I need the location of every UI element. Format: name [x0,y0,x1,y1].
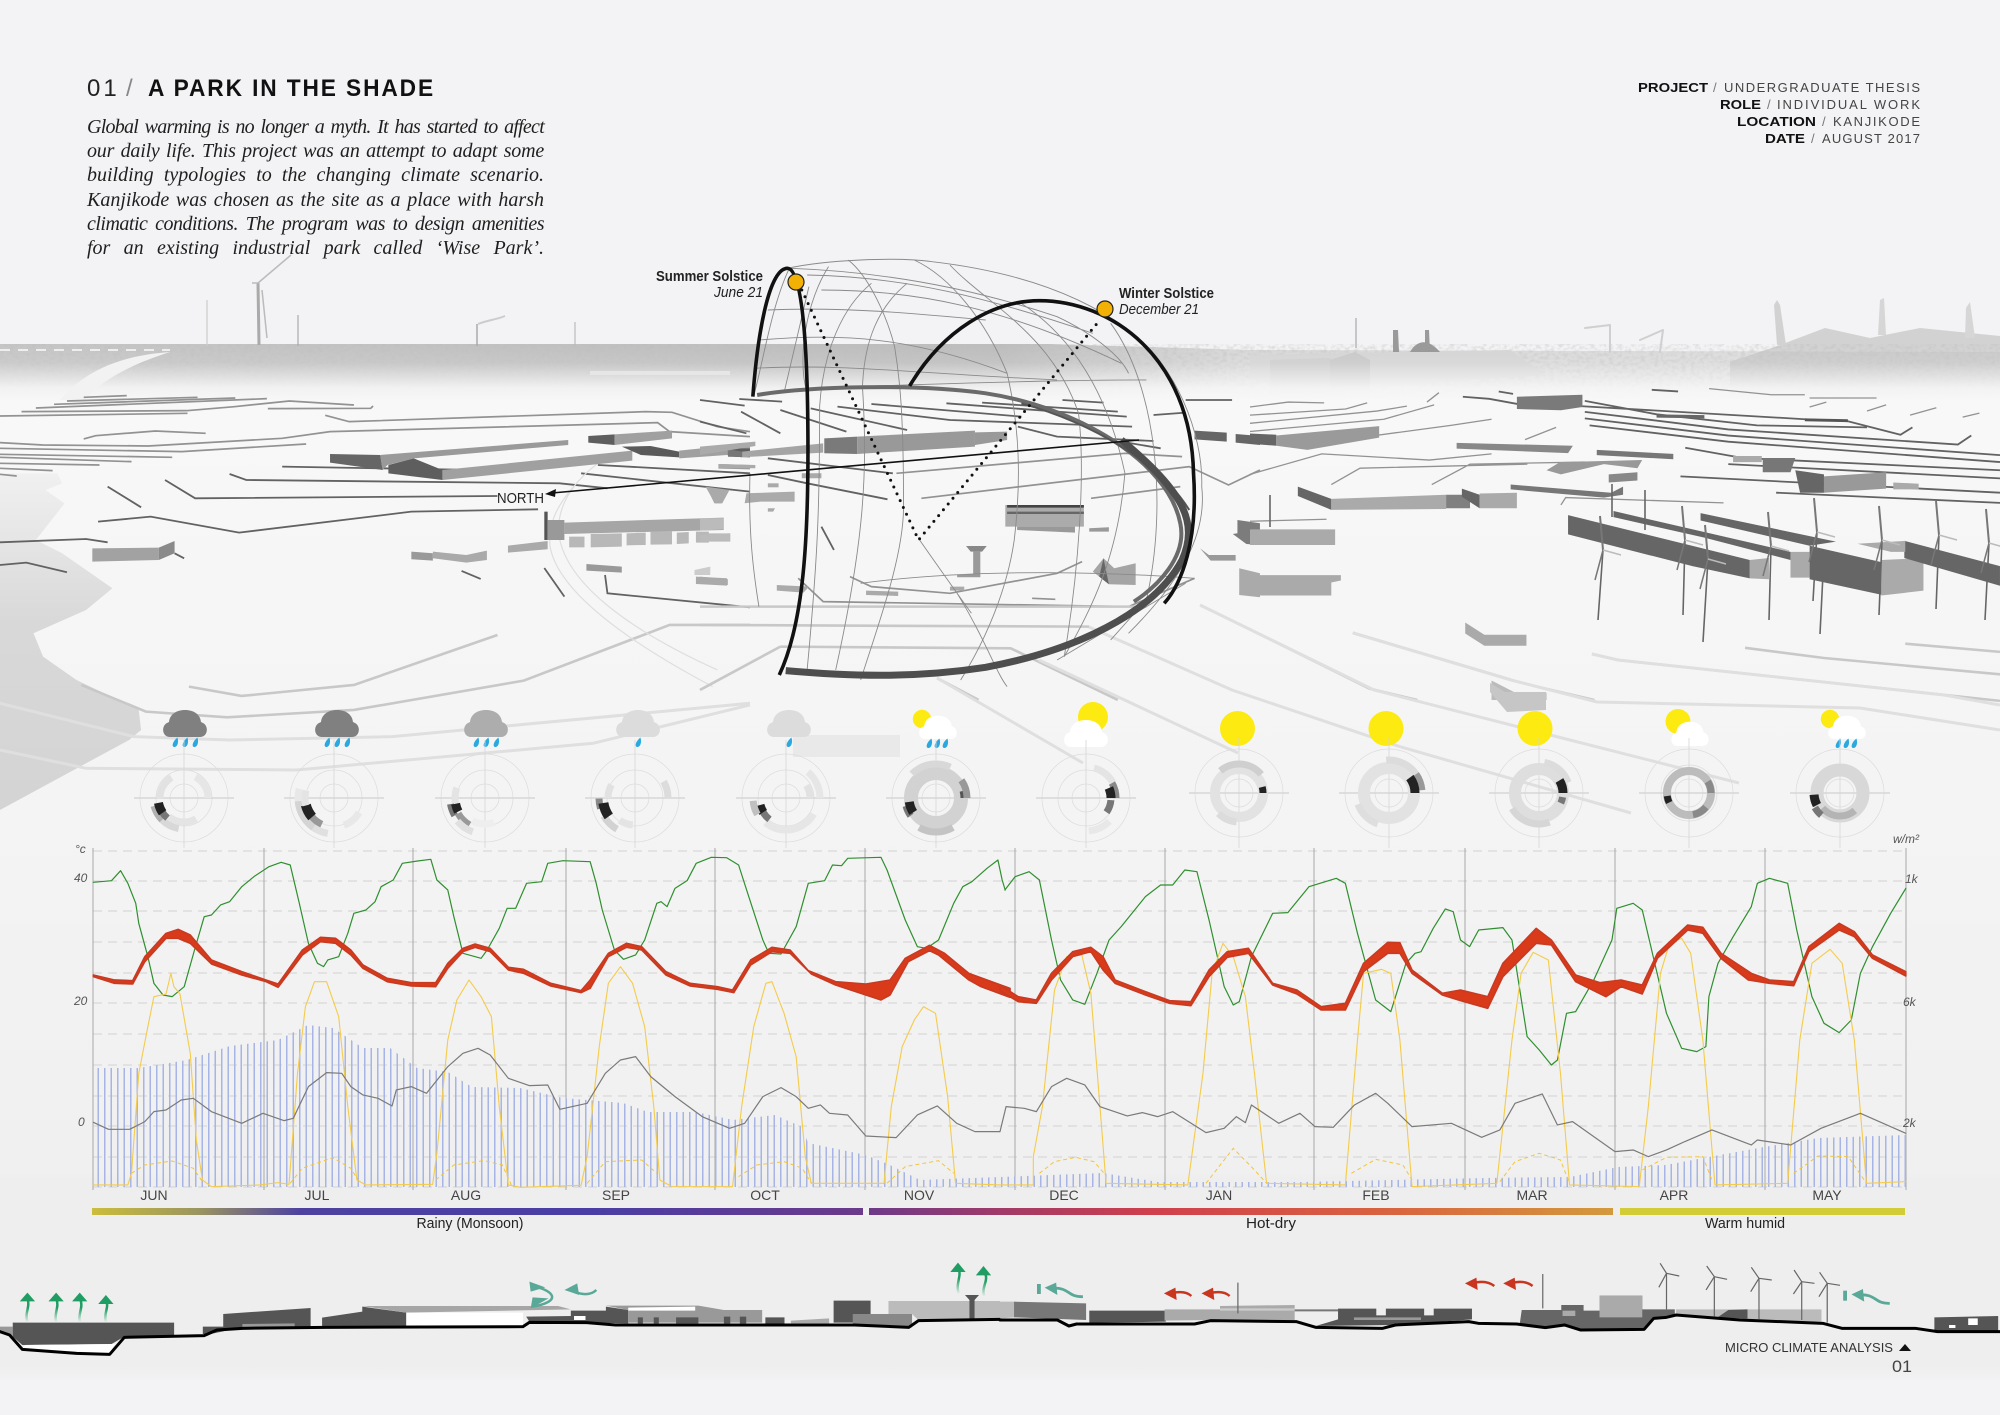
dome wireframe [750,259,1202,687]
month labels [140,1187,1842,1203]
ground ring [786,440,1188,675]
month labels: DEC [1049,1187,1079,1203]
axis labels left [73,842,88,1129]
label: winter solstice: December 21 [1119,301,1199,318]
north arrow line [545,440,1139,497]
icon: sun cloud Apr [1666,709,1709,746]
season labels [416,1216,1785,1232]
chart gridlines [93,848,1906,1190]
buildings: centre cluster under dome [700,431,1260,597]
month labels: SEP [602,1187,630,1203]
icon: sun Jan [1220,711,1255,746]
green line [93,857,1906,1065]
title: A PARK IN THE SHADE [148,75,435,102]
axis labels left: 0 [78,1115,85,1129]
contour roads: left [0,396,750,770]
axis labels right: 2k [1902,1116,1917,1130]
polar chart Sep [585,740,685,848]
icon: teal swirl arrows [529,1282,596,1308]
location line: / [1822,114,1826,129]
label: winter solstice [1119,285,1214,318]
icon: light rain cloud Sep [616,710,660,747]
contour roads: right [1250,389,2000,701]
weather icons row [163,702,1866,748]
icon: sun cloud rain Nov [913,710,957,748]
title: 01 [87,75,120,102]
label: winter solstice: Winter Solstice [1119,285,1214,302]
role line: / [1767,97,1771,112]
buildings: right cluster [1250,395,2000,700]
season colour bar [92,1207,1905,1216]
winter solstice arc [910,301,1194,603]
yellow solar line [93,938,1906,1187]
horizon photo band [0,328,2000,404]
sky: turbine, poles and factories on horizon [207,255,1975,352]
ground plane [0,402,2000,1180]
polar chart Mar [1489,738,1589,848]
icon: green rising air arrows [20,1263,991,1322]
red temperature band [93,923,1906,1010]
icon: rain cloud Jun [163,710,207,747]
date line [1765,131,1920,146]
intro paragraph: building typologies to the changing climate scenario. [87,164,544,186]
month labels: MAY [1812,1187,1842,1203]
role line: INDIVIDUAL WORK [1777,97,1920,112]
label: summer solstice: June 21 [713,284,763,301]
role line: ROLE [1720,97,1761,112]
axis labels right [1893,832,1920,1130]
sun marker: winter solstice [1097,301,1113,317]
intro paragraph: climatic conditions. The program was to design amenities [87,213,544,235]
month labels: JUN [140,1187,168,1203]
month labels: FEB [1362,1187,1390,1203]
season labels: Hot-dry [1246,1216,1297,1232]
site section: left half [0,1263,1000,1354]
label: summer solstice [656,268,763,301]
axis labels right: 6k [1903,995,1917,1009]
lower band behind section [0,1170,2000,1382]
page number: 01 [1892,1357,1912,1376]
site section: right half [1000,1263,2000,1332]
intro paragraph: Global warming is no longer a myth. It has started to affect [87,116,544,138]
label: summer solstice: Summer Solstice [656,268,763,285]
sun marker: summer solstice [788,274,804,290]
location line: LOCATION [1737,114,1816,129]
sun path dome [750,259,1202,687]
date line: / [1811,131,1815,146]
caption: micro climate analysis: MICRO CLIMATE ANALYSIS [1725,1340,1893,1355]
wind turbines on site [1270,484,2000,642]
icon: rain cloud Aug [464,710,508,747]
polar chart Feb [1339,738,1439,848]
project line: / [1713,80,1717,95]
polar chart Jun [134,740,234,848]
icon: rain cloud Jul [315,710,359,747]
icon: sun cloud Dec [1064,702,1108,747]
month labels: JAN [1206,1187,1232,1203]
axis labels left: °c [75,842,86,856]
location line: KANJIKODE [1833,114,1920,129]
back ring of horizon [757,387,1181,602]
polar chart Oct [736,740,836,848]
axis labels left: 20 [73,994,88,1008]
axis labels right: w/m² [1893,832,1920,846]
intro paragraph: for an existing industrial park called ‘Wise Park’. [87,237,544,259]
blue radiation bars [93,1025,1906,1187]
season labels: Rainy (Monsoon) [416,1216,524,1232]
polar wind charts row [134,738,1890,848]
intro paragraph [86,116,546,259]
month labels: OCT [750,1187,780,1203]
project line [1638,80,1920,95]
icon: sun Mar [1518,711,1552,746]
polar chart Jul [284,740,384,848]
polar chart Aug [435,740,535,848]
month labels: APR [1660,1187,1688,1203]
date line: AUGUST 2017 [1822,131,1920,146]
climate chart [73,832,1920,1232]
section ground line [0,1319,1000,1354]
contour roads: centre [700,399,1260,700]
axis labels right: 1k [1905,872,1919,886]
date line: DATE [1765,131,1805,146]
faded block behind icons [793,683,1546,757]
axis labels left: 40 [74,871,88,885]
icon: red hot wind arrows [1164,1278,1533,1300]
month labels: JUL [305,1187,330,1203]
month labels: MAR [1516,1187,1548,1203]
contour roads: lower right radiating [937,605,2000,813]
icon: teal wind arrows [1037,1283,1890,1303]
intro paragraph: our daily life. This project was an attempt to adapt some [87,140,544,162]
month labels: NOV [904,1187,935,1203]
polar chart May [1790,738,1890,848]
polar chart Jan [1189,738,1289,848]
icon: section turbines and poles [1238,1263,1840,1323]
dotted sun rays [802,290,1100,540]
polar chart Apr [1639,738,1739,848]
project line: PROJECT [1638,80,1708,95]
river shape [0,473,141,810]
polar chart Dec [1036,740,1136,848]
polar chart Nov [886,740,986,848]
icon: sun cloud rain May [1821,710,1866,748]
title: / [126,75,133,102]
season labels: Warm humid [1705,1216,1785,1232]
label: north: NORTH [497,490,544,507]
project details [1638,80,1920,146]
location line [1737,114,1920,129]
grey humidity line [93,1048,1906,1157]
month labels: AUG [451,1187,481,1203]
icon: light rain cloud Oct [767,710,811,747]
summer solstice arc [753,268,808,675]
buildings: left cluster [92,431,750,586]
project line: UNDERGRADUATE THESIS [1724,80,1920,95]
icon: sun Feb [1368,711,1404,746]
intro paragraph: Kanjikode was chosen as the site as a place with harsh [87,189,544,211]
